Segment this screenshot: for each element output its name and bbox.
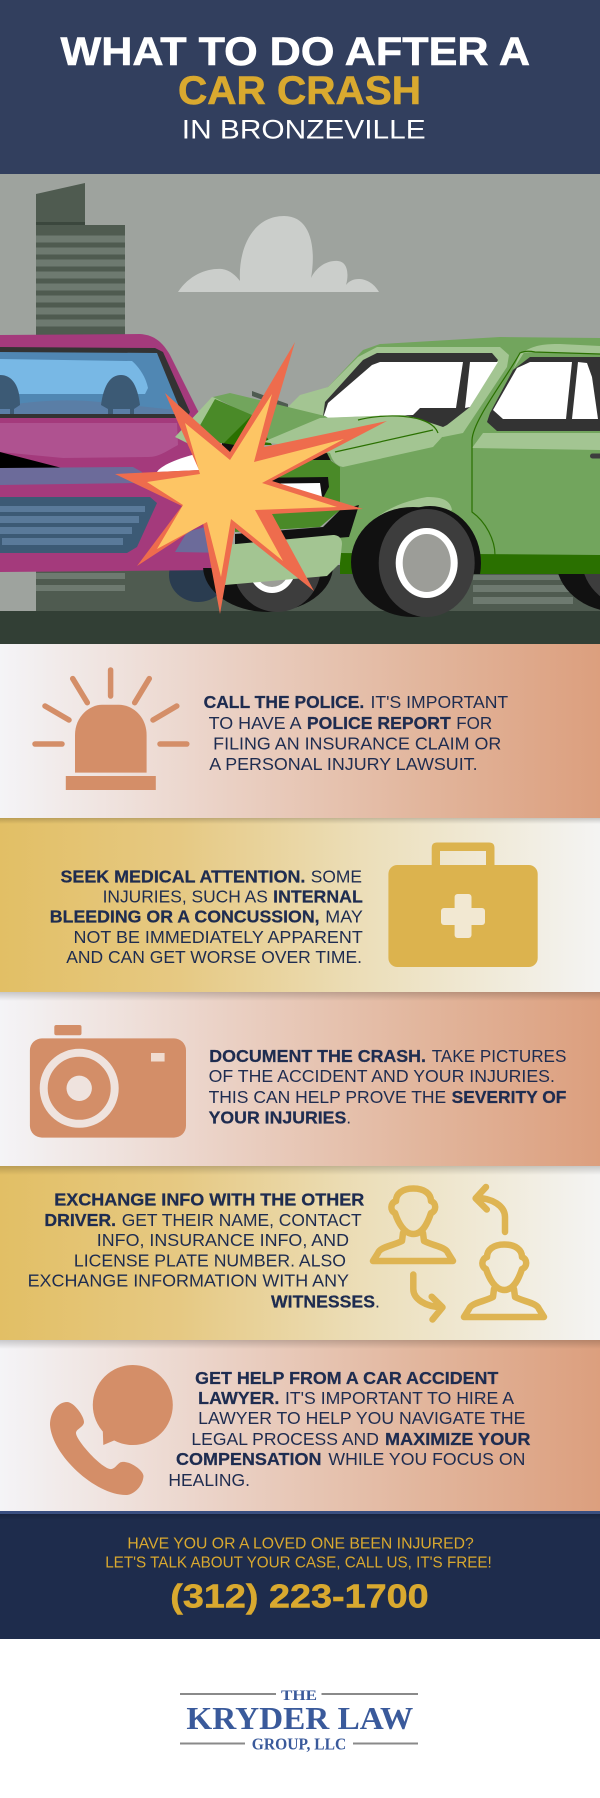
header banner xyxy=(0,0,600,174)
cloud xyxy=(178,216,379,292)
text: get help xyxy=(168,1368,531,1490)
logo: The Kryder Law Group xyxy=(180,1688,418,1754)
text: get help: LAWYER. xyxy=(198,1388,279,1408)
text: seek medical attention xyxy=(50,866,363,967)
phone number: (312) 223-1700 xyxy=(170,1577,429,1614)
text: get help: LEGAL PROCESS AND xyxy=(191,1429,379,1449)
text: document the crash: TAKE PICTURES xyxy=(432,1046,566,1066)
text: seek medical attention: AND CAN GET WORSE OVER TIME. xyxy=(66,947,362,967)
text: get help: MAXIMIZE YOUR xyxy=(385,1429,531,1449)
icon: phone with speech bubble xyxy=(50,1365,173,1495)
text: document the crash: THIS CAN HELP PROVE THE xyxy=(209,1087,446,1107)
title: CAR CRASH xyxy=(178,69,421,113)
text: document the crash: DOCUMENT THE CRASH. xyxy=(209,1046,426,1066)
text: get help: HEALING. xyxy=(168,1470,250,1490)
panel: get help from a lawyer xyxy=(0,1340,600,1512)
icon: two people exchanging xyxy=(373,1187,544,1320)
icon: camera xyxy=(30,1025,186,1138)
pink car xyxy=(0,334,230,602)
text: call the police xyxy=(204,692,509,774)
text: get help: IT'S IMPORTANT TO HIRE A xyxy=(285,1388,514,1408)
text: call the police: POLICE REPORT xyxy=(307,713,451,733)
text: document the crash: SEVERITY OF xyxy=(452,1087,567,1107)
text: seek medical attention: NOT BE IMMEDIATELY APPARENT xyxy=(74,927,363,947)
text: document the crash xyxy=(209,1046,567,1128)
text: seek medical attention: SOME xyxy=(311,866,362,886)
text: exchange info: . xyxy=(375,1292,380,1312)
text: exchange info: EXCHANGE INFO WITH THE OTHER xyxy=(54,1190,365,1210)
panel: call the police xyxy=(0,644,600,818)
logo: The Kryder Law Group: GROUP, LLC xyxy=(252,1734,346,1754)
green car xyxy=(157,337,600,620)
front wheel xyxy=(351,506,481,620)
text: seek medical attention: BLEEDING OR A CONCUSSION, xyxy=(50,906,320,926)
text: get help: GET HELP FROM A CAR ACCIDENT xyxy=(195,1368,499,1388)
building xyxy=(36,183,600,611)
arrow: down-right xyxy=(413,1274,442,1320)
crushed middle wheel xyxy=(203,568,333,612)
text: call the police: FOR xyxy=(456,713,492,733)
call to action text: LET'S TALK ABOUT YOUR CASE, CALL US, IT'S FREE! xyxy=(105,1554,492,1571)
panel: document the crash xyxy=(0,992,600,1166)
icon: first aid kit xyxy=(388,842,538,967)
icon: siren xyxy=(35,670,187,790)
title xyxy=(60,30,530,145)
text: call the police: IT'S IMPORTANT xyxy=(370,692,509,712)
arrow: up-left xyxy=(476,1187,505,1232)
text: exchange info: GET THEIR NAME, CONTACT xyxy=(122,1210,362,1230)
text: call the police: FILING AN INSURANCE CLAIM OR xyxy=(213,734,501,754)
text: seek medical attention: SEEK MEDICAL ATTENTION. xyxy=(60,866,305,886)
logo: The Kryder Law Group: KRYDER LAW xyxy=(186,1700,413,1736)
text: document the crash: YOUR INJURIES xyxy=(209,1108,346,1128)
text: exchange info: EXCHANGE INFORMATION WITH ANY xyxy=(28,1271,349,1291)
title: IN BRONZEVILLE xyxy=(182,115,426,145)
text: exchange info: LICENSE PLATE NUMBER. ALSO xyxy=(74,1251,346,1271)
text: call the police: A PERSONAL INJURY LAWSUIT. xyxy=(209,754,478,774)
text: get help: COMPENSATION xyxy=(176,1449,322,1469)
person one xyxy=(373,1188,453,1261)
call to action text: HAVE YOU OR A LOVED ONE BEEN INJURED? xyxy=(127,1535,474,1552)
crash illustration xyxy=(0,174,600,644)
road xyxy=(0,611,600,644)
explosion burst xyxy=(115,342,387,614)
logo: The Kryder Law Group: THE xyxy=(281,1688,317,1704)
title: WHAT TO DO AFTER A xyxy=(60,30,530,74)
call to action text xyxy=(105,1535,492,1571)
text: seek medical attention: INJURIES, SUCH AS xyxy=(103,886,268,906)
crumpled hood xyxy=(157,391,443,585)
text: call the police: TO HAVE A xyxy=(209,713,302,733)
text: exchange info xyxy=(28,1190,380,1312)
text: exchange info: INFO, INSURANCE INFO, AND xyxy=(97,1230,349,1250)
text: document the crash: . xyxy=(346,1108,351,1128)
panel: exchange info xyxy=(0,1166,600,1340)
text: get help: LAWYER TO HELP YOU NAVIGATE THE xyxy=(198,1408,525,1428)
text: seek medical attention: INTERNAL xyxy=(273,886,363,906)
text: seek medical attention: MAY xyxy=(325,906,363,926)
text: document the crash: OF THE ACCIDENT AND YOUR INJURIES. xyxy=(209,1066,555,1086)
panel: seek medical attention xyxy=(0,818,600,992)
text: get help: WHILE YOU FOCUS ON xyxy=(328,1449,525,1469)
text: exchange info: WITNESSES xyxy=(271,1292,375,1312)
text: exchange info: DRIVER. xyxy=(44,1210,116,1230)
call to action banner xyxy=(0,1511,600,1639)
person two xyxy=(464,1244,544,1317)
text: call the police: CALL THE POLICE. xyxy=(204,692,364,712)
